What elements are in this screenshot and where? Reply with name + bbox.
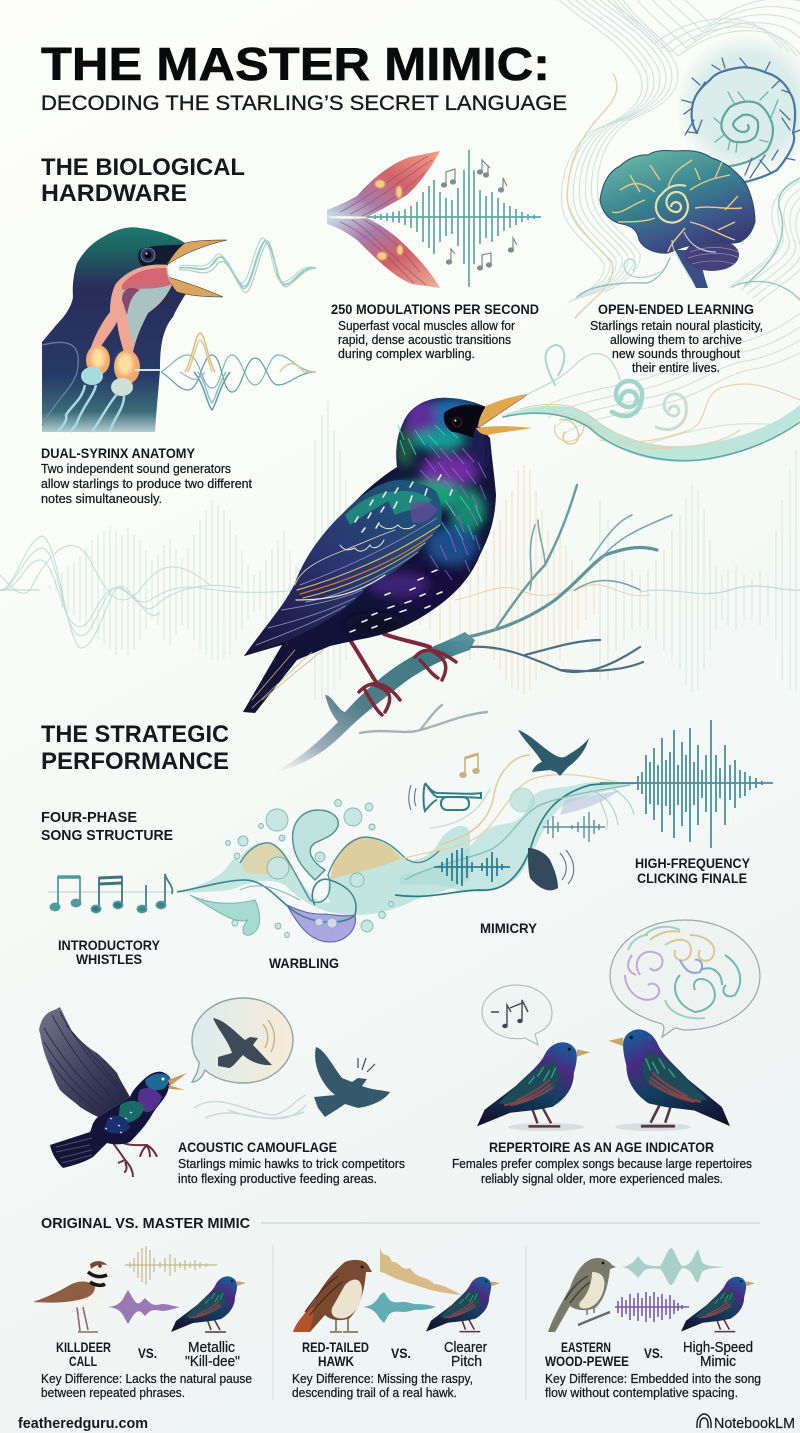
text block: repertoire as an age indicator: reliably signal older, more experienced males. [481,1171,723,1186]
text: key difference: Key Difference: Missing the raspy, [292,1371,473,1386]
heading: four-phase song structure: SONG STRUCTURE [41,827,173,844]
icon: hawk silhouette [518,730,589,776]
label: eastern wood-pewee [545,1339,629,1369]
text block: dual-syrinx anatomy: Two independent sound generators [41,461,231,476]
label: killdeer call: KILLDEER [56,1339,111,1355]
icon: bird silhouette [528,848,574,890]
heading: the strategic performance: THE STRATEGIC [41,721,229,748]
text: key difference: between repeated phrases. [41,1385,185,1400]
text block: 250 modulations per second [331,301,539,361]
speech bubble with hawk [192,998,293,1083]
label: red-tailed hawk: HAWK [318,1353,354,1369]
heading: the biological hardware: THE BIOLOGICAL [41,154,245,181]
icon: flying starling [39,1007,187,1177]
text block: repertoire as an age indicator [452,1139,752,1186]
label: high-frequency clicking finale [635,855,751,886]
repertoire illustration [477,920,760,1131]
icon: whistle notes [48,874,172,912]
label: eastern wood-pewee: EASTERN [561,1339,611,1355]
label: vs: VS. [138,1345,157,1361]
waveform: killdeer call [125,1246,217,1285]
waveform: pewee song [622,1248,725,1285]
text: key difference [292,1371,473,1400]
starling eye [452,416,462,428]
song structure diagram [48,720,773,942]
title [41,38,567,115]
label: killdeer call [56,1339,111,1369]
text: key difference: Key Difference: Lacks the natural pause [41,1371,252,1386]
label: vs: VS. [391,1345,411,1361]
panel: wood-pewee comparison [545,1248,761,1400]
text: key difference: flow without contemplative spacing. [545,1385,738,1400]
text block: 250 modulations per second: during complex warbling. [338,346,475,361]
text: key difference: descending trail of a real hawk. [292,1385,457,1400]
waveform: fast modulation [367,150,541,287]
mimicry flow lines [395,755,640,896]
label: warbling: WARBLING [269,955,339,971]
heading: original vs. master mimic: ORIGINAL VS. MASTER MIMIC [41,1215,250,1232]
icon: starling legs [350,634,456,715]
text block: acoustic camouflage: into flexing productive feeding areas. [178,1171,377,1186]
heading: the strategic performance: PERFORMANCE [41,748,229,775]
speech bubble: complex song [610,920,760,1037]
panel: hawk comparison [292,1248,500,1400]
heading: the biological hardware: HARDWARE [41,180,187,207]
acoustic camouflage illustration [39,998,390,1177]
text block: 250 modulations per second: 250 MODULATIONS PER SECOND [331,301,539,317]
label: killdeer call: CALL [69,1353,97,1369]
text block: open-ended learning: allowing them to archive [610,332,742,347]
subtitle: DECODING THE STARLING’S SECRET LANGUAGE [41,92,567,115]
icon: hawk silhouette [314,1047,390,1117]
text block: open-ended learning: new sounds throughout [612,346,740,361]
branch [275,485,672,772]
label: introductory whistles: INTRODUCTORY [58,937,161,953]
label: high-frequency clicking finale: HIGH-FREQUENCY [635,855,751,871]
speech bubble: simple song [482,985,552,1045]
text block: dual-syrinx anatomy: notes simultaneously. [41,491,162,506]
central starling [243,394,532,715]
icon: music note [460,754,479,777]
label: mimicry: MIMICRY [480,920,538,936]
icon: left starling [477,1042,590,1131]
waveform: hawk descending call [380,1248,462,1295]
panel: killdeer comparison [33,1246,252,1400]
label: high-speed mimic: High-Speed [683,1339,753,1356]
waveform: middle mimicry wave [434,848,510,886]
flowing sound lines top right [540,0,800,442]
label: high-speed mimic: Mimic [700,1353,736,1370]
label: metallic kill-dee [185,1339,240,1370]
icon: syrinx bird [42,227,227,432]
waveform: small mimicry wave [543,812,605,842]
illustration: dual syrinx bird anatomy [42,227,316,432]
text block: dual-syrinx anatomy [41,445,252,506]
icon: right starling [608,1029,730,1131]
starling wing [244,480,442,656]
label: vs: VS. [644,1345,663,1361]
label: introductory whistles: WHISTLES [76,951,142,967]
label: red-tailed hawk [302,1339,369,1369]
text block: 250 modulations per second: rapid, dense acoustic transitions [338,332,511,347]
heading: the biological hardware [41,154,245,207]
waveform: fast pewee mimic [615,1292,689,1322]
icon: killdeer [33,1258,117,1332]
icon: starling [171,1276,246,1332]
phase labels [58,855,751,971]
text block: dual-syrinx anatomy: DUAL-SYRINX ANATOMY [41,445,196,461]
waveform: clicking finale [600,720,773,848]
heading: four-phase song structure: FOUR-PHASE [41,809,137,826]
wind lines [194,1095,306,1119]
illustration: vocal muscles and waveform [327,150,541,288]
footer: notebooklm logo: NotebookLM [714,1415,795,1432]
text: key difference [545,1371,761,1400]
starling beak [476,394,532,435]
starling speckles [350,475,452,632]
song stream from the beak [500,354,800,462]
icon: starling body [243,394,532,713]
starling head mask [444,405,488,438]
footer: website: featheredguru.com [18,1415,148,1432]
main title: THE MASTER MIMIC: [41,38,550,90]
icon: starling [681,1277,755,1332]
background sound waves [0,400,800,700]
icon: neuron branches [682,58,800,188]
heading: the strategic performance [41,721,229,775]
label: clearer pitch: Pitch [451,1353,482,1370]
text block: open-ended learning: their entire lives. [632,360,720,375]
icon: red-tailed hawk [293,1260,372,1332]
label: high-frequency clicking finale: CLICKING FINALE [637,870,747,886]
text block: repertoire as an age indicator: REPERTOIRE AS AN AGE INDICATOR [489,1139,714,1155]
label: introductory whistles [58,937,161,967]
text block: open-ended learning: OPEN-ENDED LEARNING [598,301,754,317]
label: metallic kill-dee: "Kill-dee" [185,1353,240,1370]
waveform: starling hawk mimic [363,1292,436,1323]
label: clearer pitch [444,1339,487,1370]
icons: music notes [442,160,517,270]
waveform: upper syrinx wave [179,238,316,292]
text block: 250 modulations per second: Superfast vocal muscles allow for [338,318,516,333]
icon: brain [600,150,755,288]
icon: trumpet [409,783,481,811]
text block: open-ended learning [590,301,763,375]
starling tail feathers [252,648,325,708]
text block: dual-syrinx anatomy: allow starlings to produce two different [41,476,252,491]
text block: open-ended learning: Starlings retain noural plasticity, [590,318,763,333]
label: red-tailed hawk: RED-TAILED [302,1339,369,1355]
text: key difference: Key Difference: Embedded into the song [545,1371,761,1386]
label: high-speed mimic [683,1339,753,1370]
warbling flow shapes [177,800,470,942]
icon: eastern wood-pewee [548,1258,616,1332]
waveform: lower syrinx wave [161,333,316,410]
icon: vocal muscles [327,151,440,288]
text block: repertoire as an age indicator: Females prefer complex songs because large repertoires [452,1156,752,1171]
label: eastern wood-pewee: WOOD-PEWEE [545,1353,629,1369]
waveform: starling killdeer mimic [108,1290,180,1324]
starling feathers [420,445,486,580]
text: key difference [41,1371,252,1400]
heading: four-phase song structure [41,809,173,844]
icon: starling [426,1277,500,1332]
label: clearer pitch: Clearer [444,1339,487,1356]
text block: acoustic camouflage: Starlings mimic hawks to trick competitors [178,1156,405,1171]
illustration: brain with branching neurons [600,58,800,288]
text block: acoustic camouflage: ACOUSTIC CAMOUFLAGE [178,1139,337,1155]
text block: acoustic camouflage [178,1139,405,1186]
label: metallic kill-dee: Metallic [188,1339,235,1356]
